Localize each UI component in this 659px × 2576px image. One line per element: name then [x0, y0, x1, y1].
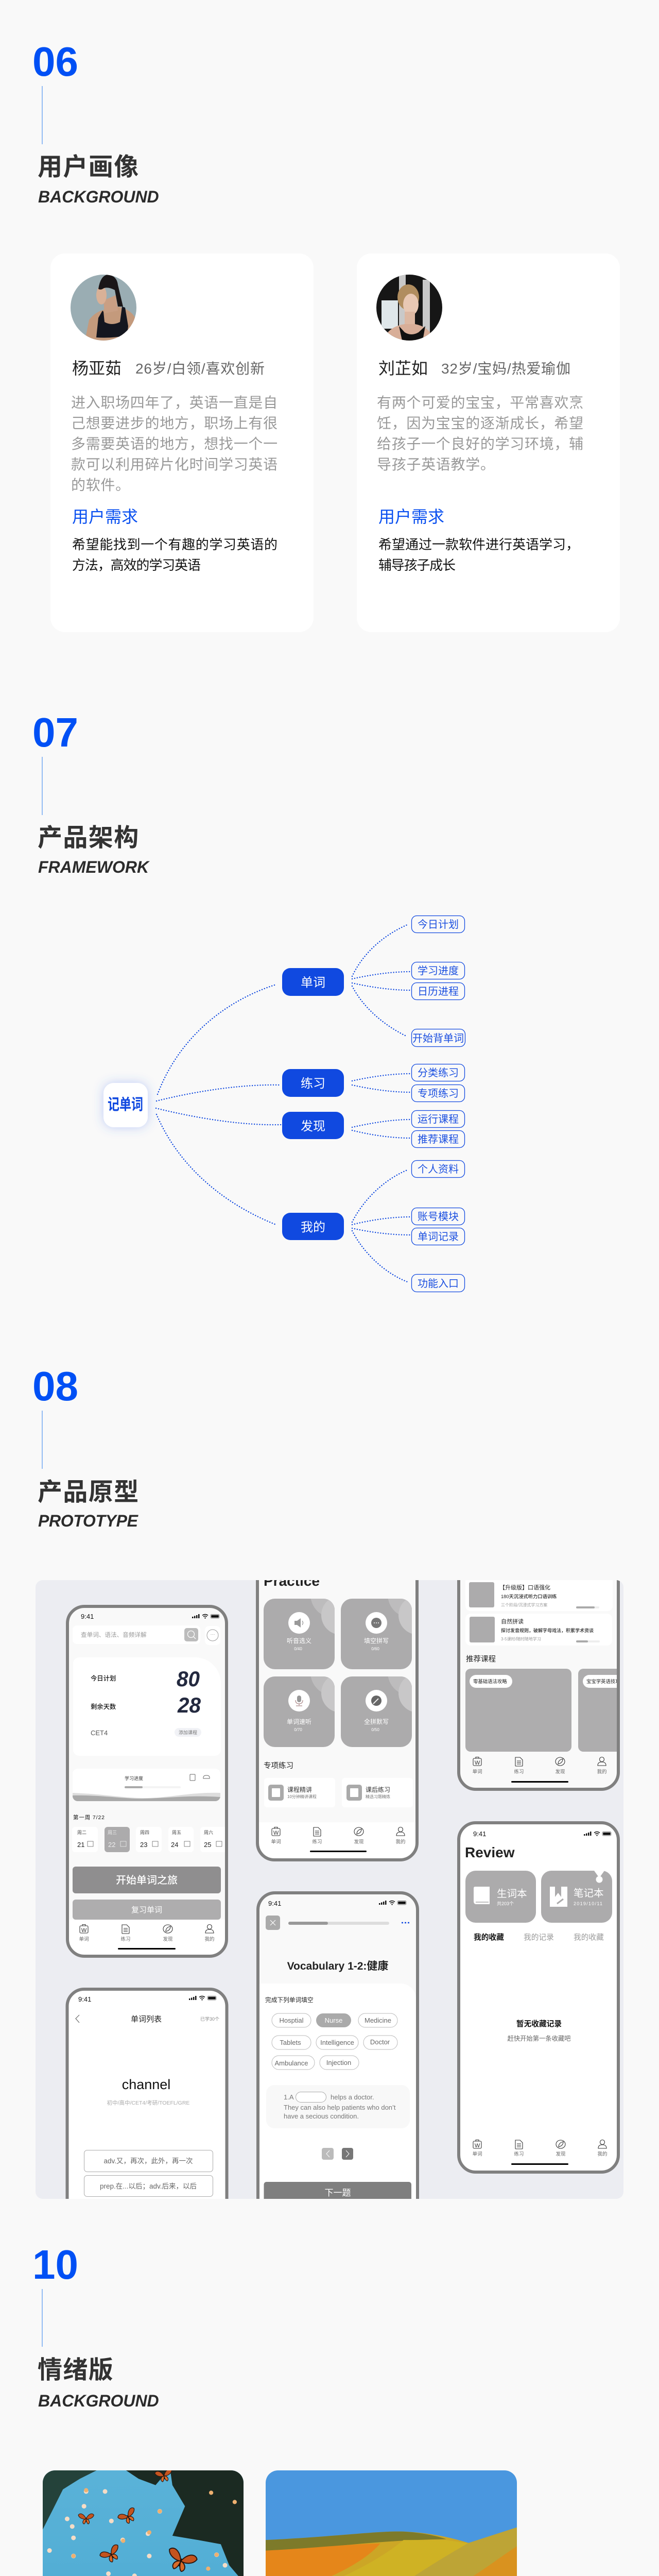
persona description: 导孩子英语教学。	[377, 456, 495, 472]
course card 1: 【升级版】口语强化	[499, 1584, 550, 1591]
persona description: 多需要英语的地方，想找一个一	[71, 436, 278, 452]
subheading: background: BACKGROUND	[38, 2392, 159, 2410]
plan card	[91, 1671, 201, 1735]
needs text: 希望能找到一个有趣的学习英语的	[72, 537, 278, 552]
leaf labels	[412, 919, 464, 1290]
status bar: 9:41	[81, 1613, 94, 1620]
word chips: Intelligence	[320, 2039, 354, 2046]
subheading: background: BACKGROUND	[38, 188, 159, 206]
tab bar: 我的	[597, 2151, 608, 2157]
heading: mood board: 情绪版	[38, 2357, 114, 2384]
nav header: 单词列表	[131, 2015, 162, 2024]
search bar: 查单词、语法、音频详解	[81, 1631, 147, 1638]
status bar: 9:41	[268, 1900, 281, 1907]
plan card: 添加课程	[179, 1730, 197, 1735]
leaf labels: 开始背单词	[412, 1032, 464, 1044]
nav header: 已学30个	[200, 2016, 219, 2022]
heading: user persona: 用户画像	[38, 154, 140, 181]
phone: vocabulary quiz screen	[258, 1893, 418, 2253]
tabs: 我的收藏	[474, 1933, 504, 1942]
node: practice: 练习	[301, 1077, 325, 1091]
heading: product framework: 产品架构	[38, 824, 140, 852]
next button	[264, 2182, 411, 2213]
heading: product prototype: 产品原型	[38, 1479, 140, 1506]
tab bar: 我的	[204, 1936, 215, 1942]
week calendar: 周二	[77, 1830, 86, 1835]
vocabulary book card: 共203个	[497, 1901, 514, 1906]
practice cards: 0/60	[371, 1647, 379, 1651]
week calendar: 周五	[172, 1830, 181, 1835]
recommended courses: 零基础语法攻略	[473, 1679, 507, 1684]
course card 1: 三个阶段/沉浸式学习方案	[501, 1602, 547, 1607]
node: words	[282, 968, 344, 996]
week calendar: 22	[108, 1841, 115, 1849]
recommended title: 推荐课程	[466, 1655, 496, 1664]
root node: app logo: 记单词	[108, 1096, 143, 1113]
tab bar	[472, 1757, 607, 1783]
plan card: 80	[177, 1667, 200, 1691]
week calendar: 25	[204, 1841, 211, 1849]
panel: prototype board	[36, 1580, 623, 2199]
node: mine: 我的	[301, 1221, 325, 1234]
fill-in question: helps a doctor.	[331, 2093, 374, 2101]
tabs: 我的记录	[524, 1933, 554, 1942]
practice cards	[264, 1599, 412, 1747]
tabs	[474, 1933, 604, 1942]
node: words: 单词	[301, 976, 325, 990]
week calendar: 21	[77, 1841, 84, 1849]
avatar: woman in sports top	[71, 275, 136, 341]
course card 2	[470, 1617, 600, 1642]
practice cards: 听音选义	[287, 1637, 311, 1645]
status bar: 9:41	[78, 1995, 91, 2003]
leaf labels: 运行课程	[418, 1113, 459, 1125]
persona description: 进入职场四年了，英语一直是自	[71, 395, 278, 411]
mood board photo: butterflies	[37, 2469, 245, 2576]
tab bar: 我的	[395, 1839, 406, 1845]
persona description: 的软件。	[71, 477, 130, 493]
word: channel	[122, 2077, 170, 2092]
tab bar: 发现	[556, 2151, 566, 2157]
practice cards: 0/50	[371, 1727, 379, 1732]
course card 1	[469, 1582, 599, 1608]
section number 08: 08	[32, 1363, 78, 1409]
section 07 header	[32, 709, 150, 876]
week calendar: 24	[171, 1841, 178, 1849]
answer option 1: adv.又，再次，此外，再一次	[103, 2157, 193, 2165]
section 06 header	[32, 39, 159, 206]
notebook card: 2019/10/11	[574, 1901, 602, 1906]
progress card	[73, 1774, 220, 1801]
practice cards: 单词速听	[287, 1718, 311, 1725]
page canvas: section 10	[32, 2242, 517, 2576]
leaf labels: 分类练习	[418, 1067, 459, 1079]
quiz toolbar	[266, 1916, 409, 1930]
week calendar: 23	[140, 1841, 147, 1849]
foliage	[43, 2470, 244, 2576]
status bar	[268, 1900, 406, 1907]
leaf nodes	[412, 916, 465, 1292]
answer option 2	[84, 2175, 213, 2197]
section 10 header	[32, 2242, 159, 2410]
persona description: 己想要进步的地方，职场上有很	[71, 415, 278, 431]
tab bar: 发现	[354, 1839, 364, 1845]
section number 06: 06	[32, 39, 78, 84]
name: 刘芷如	[378, 359, 428, 378]
empty state: 暂无收藏记录	[516, 2020, 562, 2028]
leaf labels: 功能入口	[418, 1278, 459, 1290]
tab bar: 练习	[120, 1936, 131, 1942]
needs text	[378, 537, 579, 573]
leaf labels: 个人资料	[418, 1163, 459, 1175]
recommended courses: 宝宝学英语技巧	[586, 1679, 620, 1684]
special practice cards: 10分钟精讲课程	[287, 1794, 317, 1799]
avatar: woman by window	[376, 275, 442, 341]
quiz sheet	[259, 1984, 416, 2215]
title: Review	[465, 1844, 515, 1860]
next button: 下一题	[324, 2188, 351, 2198]
name: 杨亚茹	[72, 359, 122, 378]
tab bar: 单词	[271, 1839, 281, 1845]
nav header	[76, 2015, 219, 2024]
needs text: 方法，高效的学习英语	[72, 557, 201, 573]
tab bar: 单词	[472, 1769, 482, 1775]
special practice cards: 课后练习	[366, 1786, 390, 1793]
needs heading: 用户需求	[378, 507, 444, 526]
word chips: Ambulance	[274, 2059, 308, 2067]
tab bar	[271, 1827, 405, 1852]
connectors	[156, 925, 410, 1282]
special practice cards: 课程精讲	[287, 1786, 312, 1793]
recommended courses	[465, 1669, 640, 1752]
answer option 1	[84, 2150, 213, 2172]
message button: ···	[210, 1632, 215, 1637]
needs text: 希望通过一款软件进行英语学习，	[378, 537, 579, 552]
message button	[207, 1629, 218, 1641]
section number 07: 07	[32, 709, 78, 755]
empty state	[508, 2020, 570, 2042]
tab bar	[79, 1924, 214, 1950]
week label: 第一周 7/22	[73, 1814, 105, 1821]
course card 2: 自然拼读	[501, 1618, 524, 1625]
start button: 开始单词之旅	[116, 1874, 178, 1886]
instruction: 完成下列单词填空	[265, 1996, 314, 2004]
title: Practice	[264, 1573, 320, 1589]
phone: discover screen	[457, 1580, 620, 1791]
week calendar: 周六	[204, 1829, 213, 1835]
practice cards: 0/40	[294, 1647, 302, 1651]
tab bar: 练习	[514, 1769, 524, 1775]
fill-in question: 1.A	[284, 2093, 294, 2101]
page canvas: sections 06 to 08	[34, 47, 623, 2199]
node: practice	[282, 1069, 344, 1097]
leaf labels: 专项练习	[418, 1088, 459, 1099]
review button: 复习单词	[131, 1905, 162, 1914]
word chips: Injection	[326, 2059, 351, 2066]
course card 1: 180天沉浸式听力口语训练	[501, 1594, 557, 1599]
word chips: Doctor	[370, 2038, 390, 2046]
word chips: Medicine	[365, 2016, 391, 2024]
section 08 header	[32, 1363, 140, 1530]
subheading: prototype: PROTOTYPE	[38, 1512, 139, 1530]
butterflies	[37, 2469, 219, 2576]
node: discover	[282, 1112, 344, 1139]
leaf labels: 账号模块	[418, 1211, 459, 1223]
start button	[73, 1867, 221, 1893]
empty state: 赶快开始第一条收藏吧	[508, 2035, 570, 2042]
phone: practice screen	[256, 1580, 419, 1861]
mood board photo: flower hills	[266, 2470, 521, 2576]
word chips: Nurse	[325, 2016, 342, 2024]
phone: word list screen	[67, 1989, 227, 2350]
fill-in question	[266, 2085, 410, 2128]
fill-in question: have a secious condition.	[284, 2112, 359, 2120]
practice cards: 0/70	[294, 1727, 302, 1732]
course card 2: 探讨发音规则，破解字母戏法，积累学术资谈	[501, 1628, 594, 1633]
course card 2: 3-5课时/随时随地学习	[501, 1636, 541, 1641]
leaf labels: 单词记录	[418, 1231, 459, 1243]
special practice cards: 精选习题精炼	[366, 1794, 390, 1799]
plan card: 28	[177, 1693, 201, 1717]
status bar	[473, 1830, 611, 1838]
week calendar	[72, 1827, 225, 1852]
week calendar: 周三	[108, 1830, 117, 1835]
progress card: 学习进度	[125, 1775, 143, 1781]
leaf labels: 推荐课程	[418, 1133, 459, 1145]
tab bar: 发现	[163, 1936, 173, 1942]
persona description: 款可以利用碎片化时间学习英语	[71, 456, 278, 472]
tab bar: 发现	[555, 1769, 565, 1775]
needs text: 辅导孩子成长	[378, 557, 456, 573]
fill-in question: They can also help patients who don’t	[284, 2104, 396, 2111]
subheading: framework: FRAMEWORK	[38, 858, 150, 876]
phone: home screen	[67, 1606, 227, 1956]
tab bar: 练习	[312, 1839, 322, 1845]
tab bar: 单词	[79, 1936, 89, 1942]
petals	[47, 2492, 240, 2576]
status bar	[78, 1995, 216, 2003]
status bar	[81, 1614, 219, 1619]
practice cards: 全拼默写	[364, 1718, 389, 1725]
section number 10: 10	[32, 2242, 78, 2287]
node: discover: 发现	[301, 1120, 325, 1133]
tab bar: 我的	[597, 1769, 607, 1775]
persona tags: 32岁/宝妈/热爱瑜伽	[441, 361, 570, 377]
practice cards: 填空拼写	[364, 1637, 389, 1645]
leaf labels: 学习进度	[418, 965, 459, 977]
notebook card	[541, 1871, 612, 1923]
phone: review screen	[459, 1823, 618, 2172]
persona description: 有两个可爱的宝宝，平常喜欢烹	[377, 395, 584, 411]
special practice cards	[268, 1785, 390, 1801]
root node: app logo	[103, 1083, 148, 1127]
panel: persona card 1	[71, 275, 277, 571]
tab bar: 练习	[514, 2151, 524, 2157]
persona tags: 26岁/白领/喜欢创新	[135, 361, 265, 377]
vocabulary book card	[465, 1871, 536, 1923]
leaf labels: 日历进程	[418, 986, 459, 997]
notebook card: 笔记本	[574, 1888, 604, 1899]
pager	[322, 2148, 353, 2160]
tab bar	[472, 2140, 608, 2165]
plan card: 今日计划	[91, 1674, 116, 1682]
review button	[73, 1900, 221, 1920]
needs text	[72, 537, 278, 573]
tab bar: 单词	[472, 2151, 482, 2157]
persona description	[377, 395, 584, 472]
word levels: 初中/高中/CET4/考研/TOEFL/GRE	[107, 2099, 189, 2106]
word chips: Hosptial	[280, 2016, 304, 2024]
persona description: 饪，因为宝宝的逐渐成长，希望	[377, 415, 584, 431]
panel: persona card 2	[376, 275, 583, 571]
word chips	[272, 2013, 397, 2070]
week calendar: 周四	[140, 1830, 149, 1835]
status bar: 9:41	[473, 1830, 486, 1838]
needs heading: 用户需求	[72, 507, 138, 526]
persona description	[71, 395, 278, 493]
search bar	[81, 1628, 198, 1641]
word chips: Tablets	[280, 2039, 301, 2046]
vocabulary book card: 生词本	[497, 1888, 527, 1900]
quiz title: Vocabulary 1-2:健康	[287, 1960, 388, 1972]
leaf labels: 今日计划	[418, 919, 459, 930]
tabs: 我的收藏	[574, 1933, 604, 1942]
plan card: CET4	[91, 1729, 108, 1737]
plan card: 剩余天数	[91, 1703, 116, 1710]
persona description: 给孩子一个良好的学习环境，辅	[377, 436, 584, 452]
answer option 2: prep.在...以后；adv.后来，以后	[100, 2182, 197, 2191]
mind map: product framework	[103, 916, 465, 1292]
node: mine	[282, 1213, 344, 1240]
section title: 专项练习	[264, 1761, 293, 1770]
